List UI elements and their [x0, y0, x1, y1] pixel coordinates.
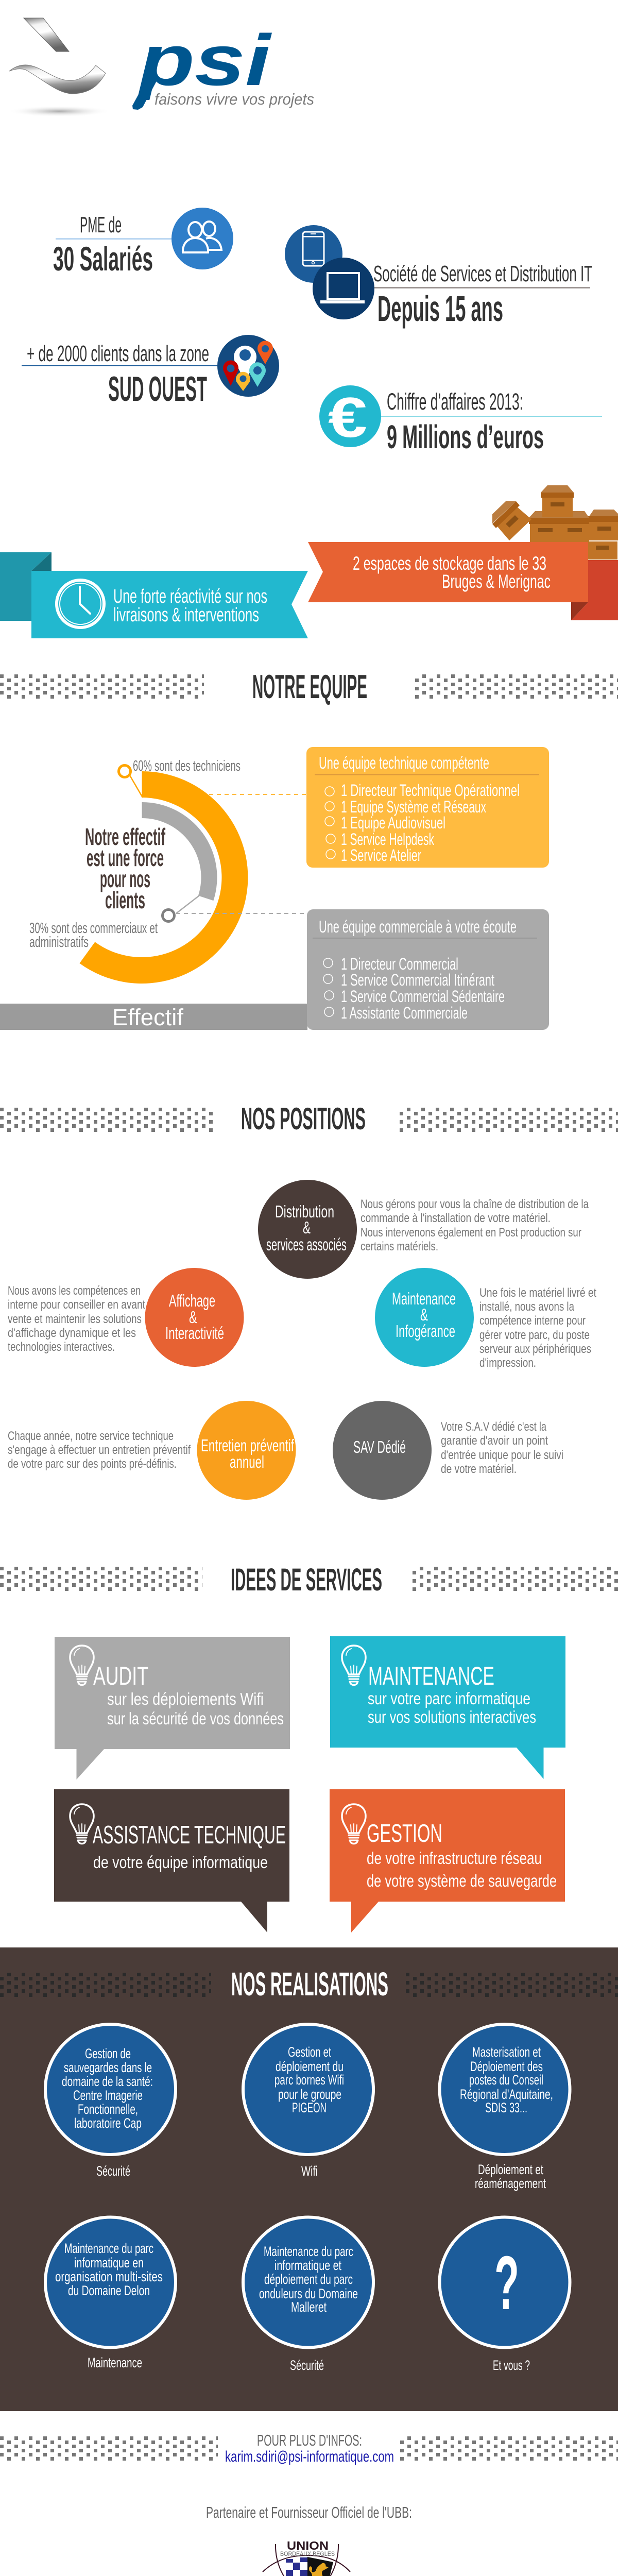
- stat: depuis 15 ans: [285, 225, 592, 329]
- project: déploiement: Déploiement et: [478, 2162, 543, 2177]
- ribbon: stockage: [308, 542, 618, 620]
- heading: notre equipe: NOTRE EQUIPE: [252, 668, 367, 705]
- logo: union bordeaux begles: BORDEAUX BEGLES: [280, 2550, 335, 2557]
- project: déploiement: postes du Conseil: [469, 2072, 543, 2088]
- ribbon: réactivité: Une forte réactivité sur nos: [113, 586, 267, 607]
- ring center text: Notre effectif: [85, 823, 165, 850]
- ring center text: clients: [105, 887, 145, 913]
- bubble: audit: sur les déploiements Wifi: [107, 1689, 264, 1708]
- chart: effectif ring: administratifs: [29, 934, 89, 951]
- bubble: gestion: de votre infrastructure réseau: [367, 1849, 542, 1868]
- position: affichage: interne pour conseiller en avant: [8, 1298, 145, 1312]
- position: affichage: d'affichage dynamique et les: [8, 1326, 136, 1340]
- stat: chiffre d'affaires: Chiffre d’affaires 2013:: [387, 388, 523, 415]
- chart: effectif ring: 60% sont des techniciens: [133, 758, 241, 774]
- project: déploiement: Régional d'Aquitaine,: [460, 2087, 553, 2102]
- project: domaine delon: Maintenance: [88, 2355, 142, 2370]
- project: domaine delon: Maintenance du parc: [64, 2241, 153, 2256]
- ribbon: réactivité: [0, 552, 308, 638]
- project: wifi: déploiement du: [276, 2059, 344, 2074]
- stat: 30 salariés: PME de: [80, 212, 122, 238]
- position: maintenance: gérer votre parc, du poste: [479, 1328, 590, 1342]
- position: maintenance: d'impression.: [479, 1356, 536, 1370]
- panel: nos realisations: NOS REALISATIONS: [231, 1965, 388, 2003]
- stat: depuis 15 ans: Depuis 15 ans: [377, 289, 503, 329]
- position: sav: garantie d'avoir un point: [441, 1434, 548, 1448]
- project: domaine delon: organisation multi-sites: [55, 2269, 163, 2284]
- bubble: audit: [55, 1637, 290, 1780]
- project: déploiement: réaménagement: [475, 2176, 546, 2191]
- icon: euro: [319, 385, 381, 449]
- bubble: maintenance: sur vos solutions interactives: [368, 1707, 536, 1726]
- bubble: assistance technique: de votre équipe informatique: [93, 1853, 268, 1872]
- partner text: Partenaire et Fournisseur Officiel de l'UBB:: [206, 2503, 412, 2521]
- project: domaine delon: du Domaine Delon: [68, 2283, 150, 2298]
- project: sauvegardes: Sécurité: [96, 2163, 130, 2179]
- icon: cardboard boxes: [492, 485, 618, 560]
- ribbon: réactivité: livraisons & interventions: [113, 604, 259, 626]
- position: entretien: Chaque année, notre service technique: [8, 1429, 174, 1443]
- project: sauvegardes: sauvegardes dans le: [64, 2060, 152, 2075]
- position: distribution: commande à l'installation de votre matériel.: [360, 1211, 551, 1225]
- ring center text: pour nos: [100, 866, 150, 892]
- project: domaine malleret: Sécurité: [290, 2358, 324, 2373]
- position: distribution: Distribution: [275, 1202, 334, 1221]
- project: sauvegardes: laboratoire Cap: [74, 2115, 142, 2131]
- panel: équipe commerciale: 1 Service Commercial Sédentaire: [341, 987, 505, 1006]
- position: maintenance: [375, 1268, 596, 1370]
- contact: karim.sdiri@psi-informatique.com: [225, 2448, 394, 2465]
- project: et vous: ?: [494, 2241, 519, 2326]
- project: domaine malleret: onduleurs du Domaine: [259, 2286, 358, 2301]
- panel: équipe technique: 1 Equipe Système et Réseaux: [341, 798, 486, 816]
- position: affichage: Interactivité: [165, 1324, 224, 1343]
- tagline: faisons vivre vos projets: [154, 90, 314, 108]
- position: entretien: Entretien préventif: [201, 1436, 295, 1455]
- panel: nos realisations: [0, 1947, 618, 2411]
- logo: union bordeaux begles: UNION: [287, 2539, 329, 2552]
- project: déploiement: SDIS 33...: [485, 2100, 527, 2115]
- stat: 30 salariés: 30 Salariés: [53, 240, 153, 278]
- project: domaine malleret: déploiement du parc: [264, 2272, 353, 2287]
- project: wifi: Wifi: [301, 2163, 318, 2179]
- position: maintenance: Maintenance: [392, 1289, 456, 1308]
- bubble: assistance technique: [54, 1789, 289, 1933]
- chart: effectif ring: 30% sont des commerciaux et: [29, 920, 158, 937]
- position: distribution: certains matériels.: [360, 1240, 438, 1253]
- bubble: audit: sur la sécurité de vos données: [107, 1709, 284, 1728]
- project: domaine malleret: Maintenance du parc: [264, 2244, 353, 2259]
- project: déploiement: Déploiement des: [470, 2059, 543, 2074]
- ring center text: [85, 823, 165, 913]
- bubble: gestion: de votre système de sauvegarde: [367, 1871, 557, 1890]
- project: domaine delon: informatique en: [74, 2255, 144, 2270]
- panel: équipe technique: 1 Service Atelier: [341, 846, 421, 865]
- project: wifi: [243, 2024, 373, 2179]
- bubble: assistance technique: ASSISTANCE TECHNIQUE: [93, 1821, 286, 1849]
- stat: chiffre d'affaires: [319, 385, 602, 455]
- project: domaine malleret: informatique et: [274, 2258, 341, 2273]
- project: wifi: Gestion et: [288, 2044, 331, 2060]
- project: et vous: [440, 2217, 570, 2373]
- bubble: maintenance: sur votre parc informatique: [368, 1689, 530, 1708]
- position: maintenance: compétence interne pour: [479, 1314, 586, 1328]
- bar: effectif: Effectif: [112, 1004, 183, 1030]
- project: et vous: Et vous ?: [493, 2358, 530, 2373]
- position: entretien: de votre parc sur des points pré-définis.: [8, 1457, 177, 1471]
- position: affichage: [8, 1268, 244, 1367]
- project: déploiement: Masterisation et: [472, 2044, 541, 2060]
- project: wifi: PIGEON: [292, 2100, 327, 2115]
- bar: effectif: [0, 1004, 307, 1030]
- panel: équipe technique: 1 Service Helpdesk: [341, 830, 435, 849]
- position: distribution: services associés: [266, 1235, 347, 1254]
- panel: équipe technique: 1 Directeur Technique Opérationnel: [341, 781, 520, 800]
- bubble: maintenance: [330, 1636, 565, 1779]
- icon: smartphone: [285, 225, 342, 283]
- position: sav: d'entrée unique pour le suivi: [441, 1448, 563, 1462]
- ribbon: stockage: Bruges & Merignac: [442, 571, 551, 592]
- panel: équipe commerciale: 1 Directeur Commercial: [341, 955, 458, 973]
- position: maintenance: Infogérance: [396, 1321, 455, 1341]
- project: domaine delon: [45, 2217, 176, 2370]
- heading: notre equipe: [0, 668, 618, 705]
- project: sauvegardes: Gestion de: [85, 2046, 131, 2061]
- heading: idees de services: IDEES DE SERVICES: [231, 1562, 382, 1597]
- panel: équipe technique: [306, 747, 549, 868]
- heading: nos positions: [0, 1101, 618, 1136]
- position: sav: de votre matériel.: [441, 1462, 517, 1476]
- panel: équipe commerciale: 1 Service Commercial Itinérant: [341, 971, 494, 989]
- bubble: gestion: GESTION: [367, 1820, 442, 1848]
- project: sauvegardes: domaine de la santé:: [62, 2074, 153, 2089]
- logo: union bordeaux begles: [263, 2539, 350, 2576]
- logo: psi wordmark: [132, 20, 314, 110]
- project: domaine malleret: Malleret: [291, 2299, 327, 2315]
- stat: 30 salariés: [53, 208, 233, 278]
- project: déploiement: [440, 2024, 570, 2191]
- icon: clock: [57, 580, 104, 628]
- stat: sud ouest: [22, 335, 279, 409]
- position: affichage: technologies interactives.: [8, 1340, 115, 1354]
- position: entretien: annuel: [230, 1452, 264, 1471]
- project: sauvegardes: Fonctionnelle,: [78, 2102, 138, 2117]
- position: sav: SAV Dédié: [353, 1437, 406, 1456]
- logo: chrome swoosh: [8, 18, 111, 117]
- position: distribution: &: [303, 1218, 311, 1237]
- panel: équipe commerciale: 1 Assistante Commerciale: [341, 1004, 468, 1022]
- chart: effectif ring: [29, 758, 306, 984]
- position: affichage: Affichage: [169, 1291, 215, 1310]
- position: distribution: [258, 1180, 589, 1279]
- position: maintenance: &: [420, 1305, 428, 1324]
- contact: POUR PLUS D'INFOS:: [257, 2431, 362, 2449]
- bubble: maintenance: MAINTENANCE: [368, 1662, 494, 1690]
- heading: idees de services: [0, 1562, 618, 1597]
- contact: [0, 2431, 618, 2465]
- panel: équipe commerciale: Une équipe commerciale à votre écoute: [319, 917, 517, 936]
- position: entretien: s'engage à effectuer un entretien préventif: [8, 1443, 191, 1457]
- stat: sud ouest: + de 2000 clients dans la zone: [27, 341, 209, 366]
- icon: laptop: [313, 258, 374, 319]
- position: sav: Votre S.A.V dédié c'est la: [441, 1420, 546, 1434]
- bubble: audit: AUDIT: [93, 1662, 148, 1690]
- heading: nos positions: NOS POSITIONS: [241, 1101, 366, 1136]
- stat: sud ouest: SUD OUEST: [108, 369, 207, 409]
- bubble: gestion: [330, 1789, 565, 1933]
- panel: équipe technique: 1 Equipe Audiovisuel: [341, 814, 445, 832]
- position: affichage: &: [189, 1308, 197, 1327]
- project: domaine malleret: [243, 2217, 373, 2373]
- project: sauvegardes: Centre Imagerie: [73, 2088, 143, 2103]
- icon: map pins: [217, 335, 279, 397]
- position: entretien: [8, 1401, 296, 1500]
- panel: équipe technique: Une équipe technique compétente: [319, 753, 489, 772]
- ring center text: est une force: [87, 844, 164, 871]
- position: sav: [333, 1401, 563, 1500]
- project: sauvegardes: [45, 2024, 176, 2179]
- project: wifi: pour le groupe: [278, 2087, 341, 2102]
- position: affichage: vente et maintenir les solutions: [8, 1312, 142, 1326]
- logo: psi wordmark: psi: [136, 20, 272, 100]
- icon: people: [171, 208, 233, 269]
- icon: euro: €: [328, 386, 367, 449]
- panel: équipe commerciale: [307, 909, 549, 1030]
- position: affichage: Nous avons les compétences en: [8, 1284, 141, 1298]
- project: wifi: parc bornes Wifi: [274, 2072, 344, 2088]
- position: maintenance: installé, nous avons la: [479, 1300, 574, 1314]
